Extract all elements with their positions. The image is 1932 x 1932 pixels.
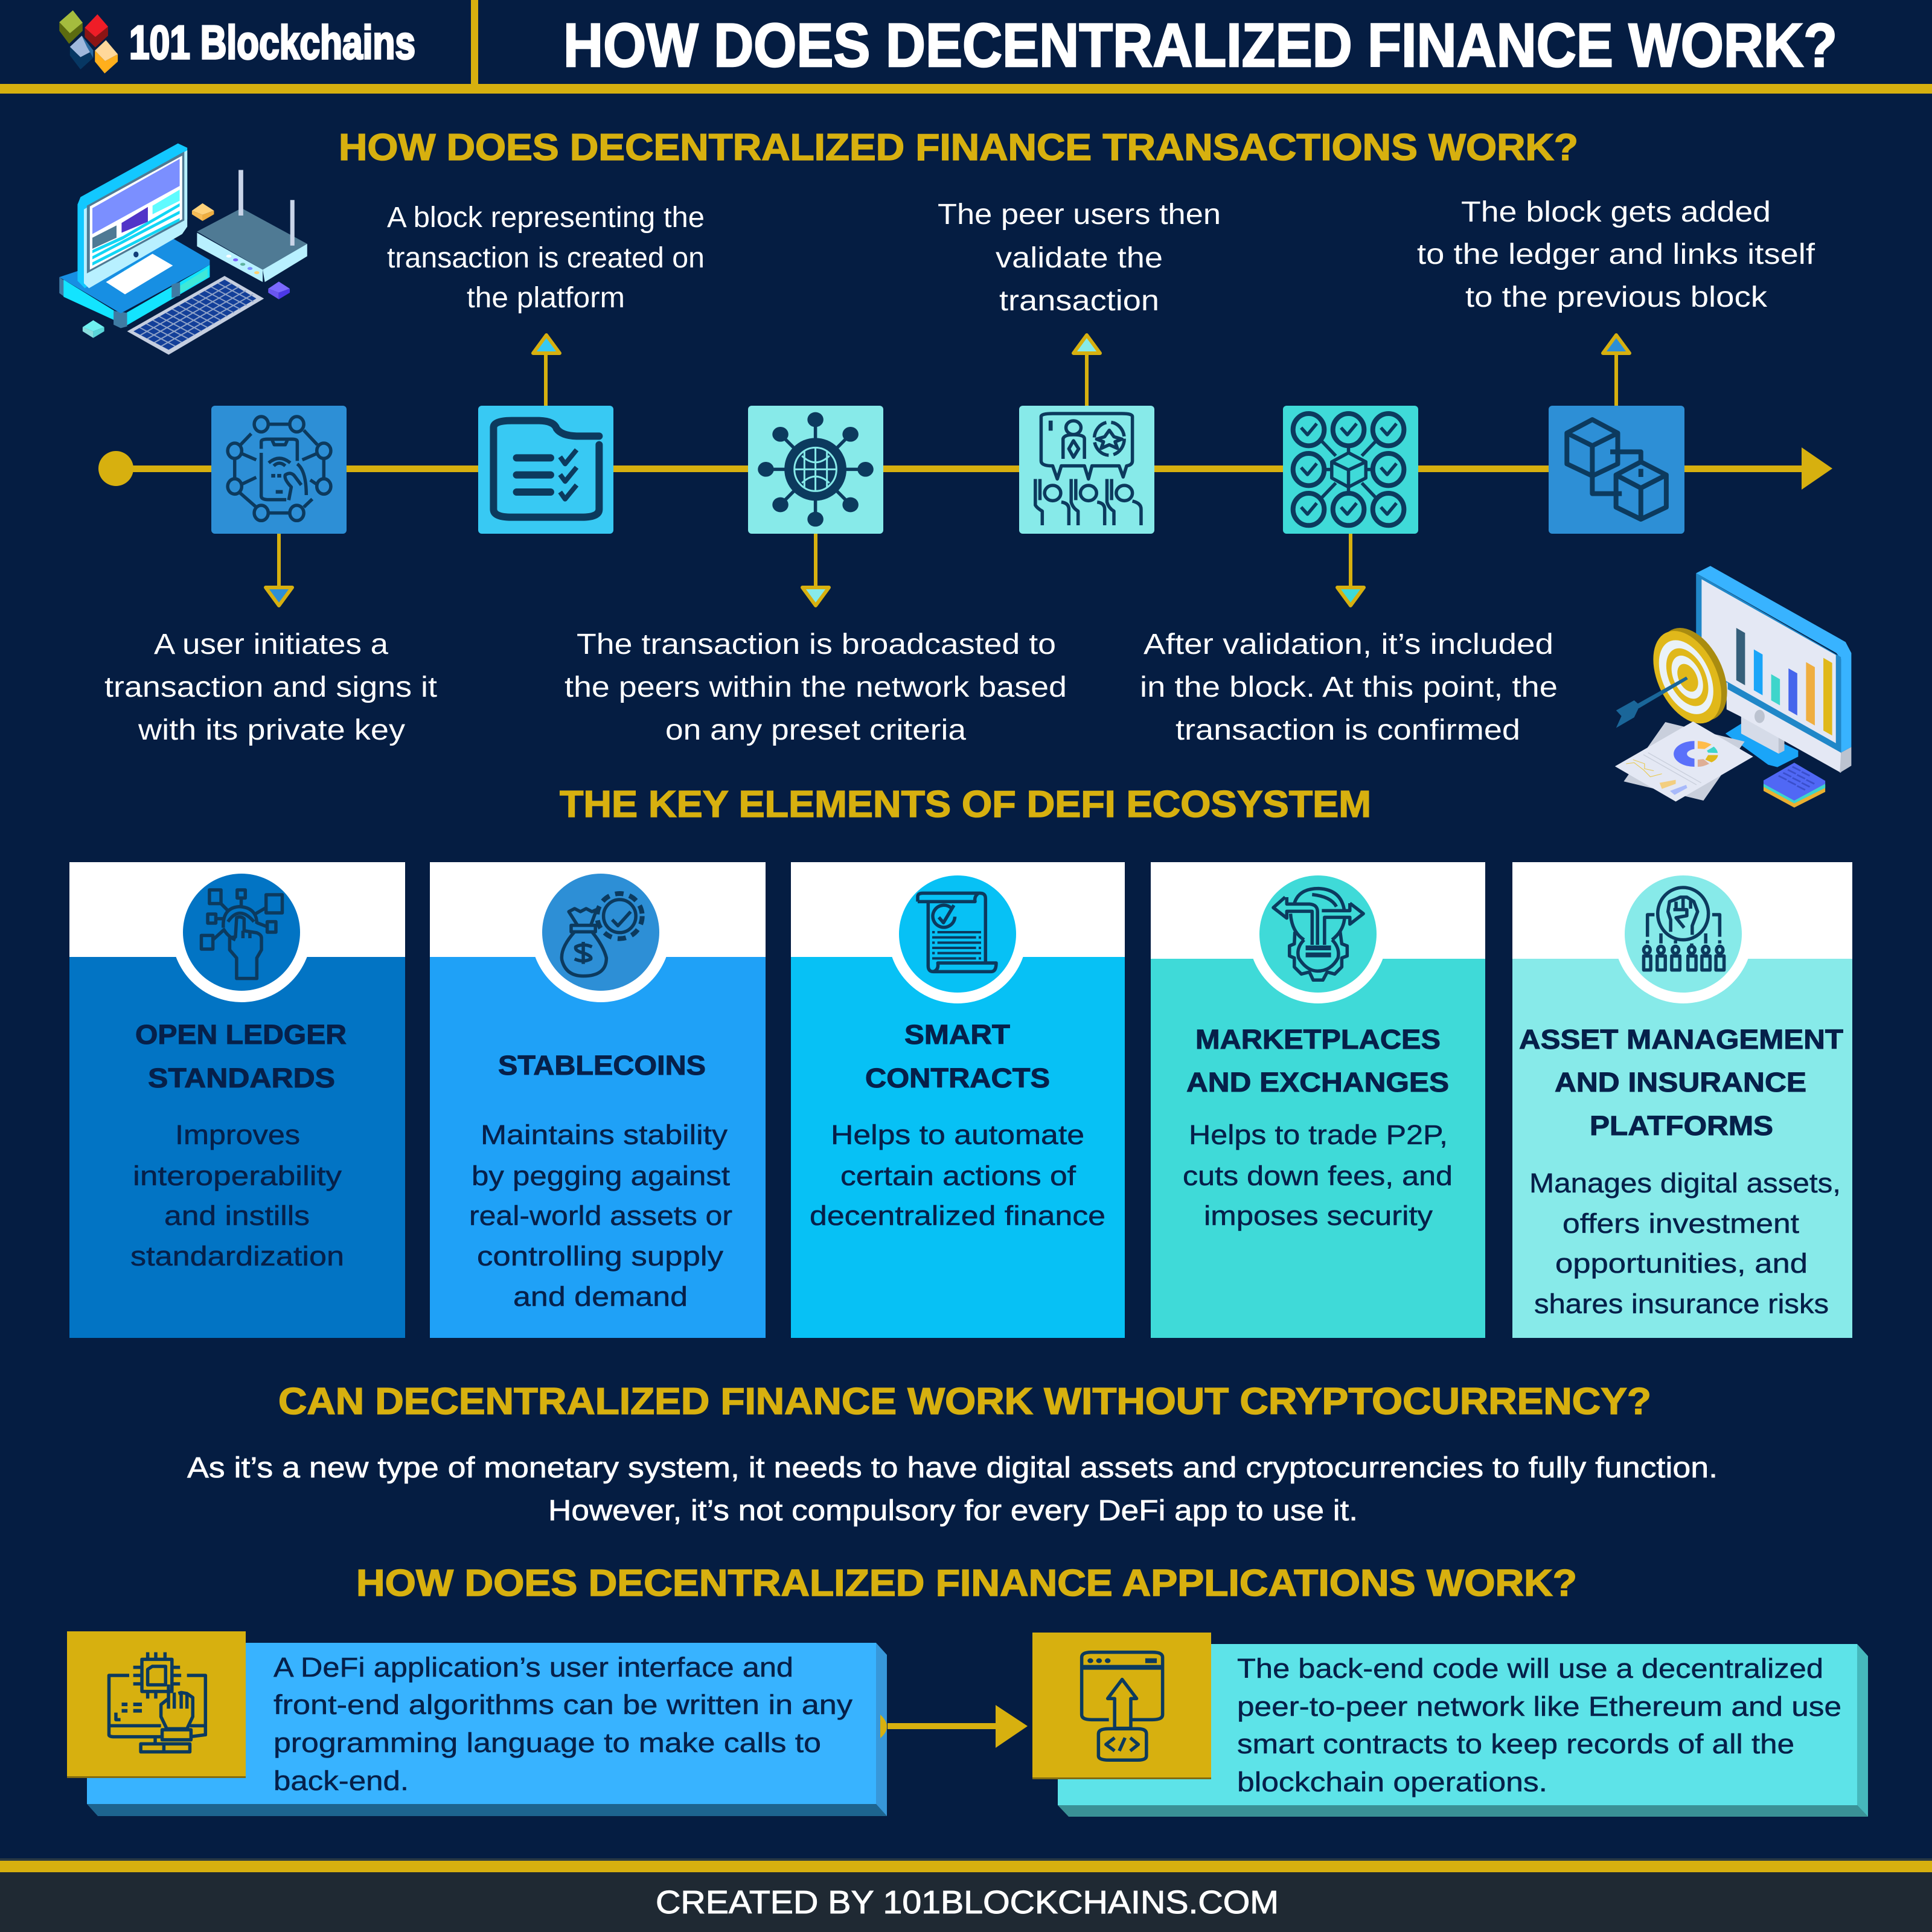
panel text: blockchain operations. bbox=[1237, 1767, 1547, 1797]
step text: broadcast bbox=[565, 629, 1067, 746]
step text: added to ledger: to the previous block bbox=[1465, 281, 1768, 313]
step text: peers validate: The peer users then bbox=[938, 199, 1221, 231]
card body: decentralized finance bbox=[810, 1200, 1105, 1231]
panel: back-end bbox=[1032, 1633, 1868, 1817]
step box 6: linked blocks icon bbox=[1549, 406, 1684, 534]
step text: after validation: transaction is confirmed bbox=[1176, 714, 1520, 746]
card body: by pegging against bbox=[472, 1160, 731, 1191]
panel: asset management and insurance platforms bbox=[1512, 862, 1852, 1338]
card heading bbox=[135, 1019, 347, 1093]
step text: added to ledger bbox=[1417, 196, 1815, 313]
arrow: step 1 down bbox=[266, 534, 292, 606]
card body: offers investment bbox=[1563, 1208, 1800, 1239]
panel: marketplaces and exchanges bbox=[1151, 862, 1485, 1338]
step text: user initiates: transaction and signs it bbox=[104, 671, 437, 703]
icon: fist and people bbox=[1643, 888, 1724, 970]
panel text: The back-end code will use a decentralized bbox=[1237, 1653, 1823, 1684]
panel: front-end bbox=[67, 1631, 887, 1816]
card heading bbox=[865, 1019, 1050, 1093]
panel text: programming language to make calls to bbox=[273, 1727, 821, 1758]
icon: phone network bbox=[228, 417, 331, 520]
step text: peers validate bbox=[938, 199, 1221, 317]
card body: and instills bbox=[164, 1200, 310, 1231]
step box 5: validation grid icon bbox=[1283, 406, 1418, 534]
panel: stablecoins bbox=[430, 862, 766, 1338]
step text: block created bbox=[387, 202, 705, 314]
card heading bbox=[1519, 1024, 1843, 1141]
step text: broadcast: the peers within the network based bbox=[565, 671, 1067, 703]
card heading bbox=[1186, 1024, 1449, 1098]
section heading: transactions: HOW DOES DECENTRALIZED FINANCE TRANSACTIONS WORK? bbox=[339, 127, 1578, 168]
step text: after validation bbox=[1140, 629, 1558, 746]
logo: 101 Blockchains bbox=[59, 10, 415, 74]
card heading: PLATFORMS bbox=[1590, 1110, 1773, 1141]
step box 3: global network icon bbox=[748, 406, 883, 534]
icon: logo cubes bbox=[59, 10, 118, 74]
card body: Helps to automate bbox=[831, 1119, 1084, 1150]
card heading: SMART bbox=[904, 1019, 1010, 1050]
icon: peers validating bbox=[1035, 414, 1141, 525]
card body: controlling supply bbox=[477, 1241, 724, 1271]
card body bbox=[1183, 1119, 1453, 1231]
card body: real-world assets or bbox=[469, 1200, 732, 1231]
section heading: key elements: THE KEY ELEMENTS OF DEFI ECOSYSTEM bbox=[560, 784, 1371, 825]
card heading: ASSET MANAGEMENT bbox=[1519, 1024, 1843, 1055]
step text: block created: transaction is created on bbox=[387, 242, 705, 274]
card body bbox=[469, 1119, 732, 1312]
arrow: step 4 up bbox=[1073, 335, 1100, 406]
panel text: smart contracts to keep records of all the bbox=[1237, 1729, 1794, 1759]
step text: peers validate: transaction bbox=[999, 285, 1159, 317]
arrow in target bbox=[1616, 677, 1688, 728]
logo wordmark: 101 Blockchains bbox=[129, 16, 415, 69]
illustration: monitor with target bbox=[1615, 566, 1851, 808]
panel text: front-end algorithms can be written in any bbox=[273, 1689, 853, 1720]
card body bbox=[1529, 1168, 1841, 1319]
panel: open ledger standards bbox=[69, 862, 405, 1338]
illustration: computer and router bbox=[59, 143, 307, 355]
panel text bbox=[273, 1652, 853, 1796]
card heading: AND INSURANCE bbox=[1555, 1067, 1806, 1098]
card heading: CONTRACTS bbox=[865, 1063, 1050, 1093]
icon: network hand bbox=[202, 890, 282, 979]
step text: added to ledger: The block gets added bbox=[1461, 196, 1771, 228]
step text: user initiates bbox=[104, 629, 437, 746]
icon: bulb with arrows and gear bbox=[1273, 889, 1363, 980]
footer credit: CREATED BY 101BLOCKCHAINS.COM bbox=[656, 1884, 1279, 1921]
icon: contract scroll bbox=[918, 893, 996, 971]
panel text bbox=[1237, 1653, 1841, 1797]
card body: shares insurance risks bbox=[1534, 1288, 1829, 1319]
step text: after validation: in the block. At this point, the bbox=[1140, 671, 1558, 703]
arrow: connector bbox=[880, 1705, 1028, 1748]
card body: cuts down fees, and bbox=[1183, 1160, 1453, 1191]
icon: linked blocks bbox=[1567, 420, 1666, 519]
panel: smart contracts bbox=[791, 862, 1125, 1338]
card body: Maintains stability bbox=[481, 1119, 728, 1150]
step box 4: peer audience icon bbox=[1019, 406, 1154, 534]
icon: global network bbox=[758, 412, 874, 526]
card body: Manages digital assets, bbox=[1529, 1168, 1841, 1198]
step text: user initiates: A user initiates a bbox=[154, 629, 388, 661]
icon: window with upload arrow bbox=[1082, 1652, 1163, 1760]
card body: opportunities, and bbox=[1555, 1248, 1808, 1279]
arrow: step 2 up bbox=[533, 335, 560, 406]
step text: peers validate: validate the bbox=[996, 242, 1163, 274]
card heading: STANDARDS bbox=[148, 1063, 335, 1093]
card body bbox=[810, 1119, 1105, 1231]
panel text: peer-to-peer network like Ethereum and use bbox=[1237, 1691, 1841, 1722]
section heading: without cryptocurrency: CAN DECENTRALIZED FINANCE WORK WITHOUT CRYPTOCURRENCY? bbox=[278, 1381, 1651, 1422]
card heading: MARKETPLACES bbox=[1195, 1024, 1441, 1055]
card body: Helps to trade P2P, bbox=[1189, 1119, 1448, 1150]
timeline bbox=[98, 447, 1832, 490]
card body: imposes security bbox=[1204, 1200, 1433, 1231]
card body: certain actions of bbox=[840, 1160, 1076, 1191]
card body: interoperability bbox=[133, 1160, 342, 1191]
step text: broadcast: on any preset criteria bbox=[665, 714, 966, 746]
header bbox=[0, 0, 1932, 94]
icon: checklist folder bbox=[493, 421, 599, 517]
card body: Improves bbox=[175, 1119, 300, 1150]
paragraph: However, it’s not compulsory for every DeFi app to use it. bbox=[548, 1495, 1358, 1527]
card body: and demand bbox=[513, 1281, 688, 1312]
panel text: A DeFi application’s user interface and bbox=[273, 1652, 793, 1683]
icon: validated block grid bbox=[1293, 414, 1404, 525]
section heading: applications: HOW DOES DECENTRALIZED FINANCE APPLICATIONS WORK? bbox=[356, 1563, 1577, 1604]
footer bbox=[0, 1858, 1932, 1932]
step text: block created: A block representing the bbox=[387, 202, 705, 234]
icon: money bag and gear bbox=[561, 894, 642, 976]
panel text: back-end. bbox=[273, 1765, 409, 1796]
arrow: step 6 up bbox=[1603, 335, 1630, 406]
step box 1: signing icon bbox=[211, 406, 347, 534]
card heading: AND EXCHANGES bbox=[1186, 1067, 1449, 1098]
step box 2: checklist folder icon bbox=[478, 406, 613, 534]
paragraph: As it’s a new type of monetary system, it needs to have digital assets and cryptocurrencies to fully function. bbox=[187, 1452, 1718, 1484]
arrow: step 3 down bbox=[802, 534, 829, 606]
icon: chip and hand on monitor bbox=[109, 1652, 205, 1752]
card heading: OPEN LEDGER bbox=[135, 1019, 347, 1050]
step text: user initiates: with its private key bbox=[138, 714, 405, 746]
step text: broadcast: The transaction is broadcasted to bbox=[577, 629, 1056, 661]
step text: added to ledger: to the ledger and links itself bbox=[1417, 238, 1815, 270]
step text: after validation: After validation, it’s included bbox=[1144, 629, 1553, 661]
paragraph bbox=[187, 1452, 1718, 1527]
step text: block created: the platform bbox=[467, 282, 625, 314]
card body bbox=[130, 1119, 344, 1271]
card body: standardization bbox=[130, 1241, 344, 1271]
arrow: step 5 down bbox=[1337, 534, 1364, 606]
target bbox=[1640, 620, 1740, 732]
card heading: STABLECOINS bbox=[498, 1050, 706, 1081]
